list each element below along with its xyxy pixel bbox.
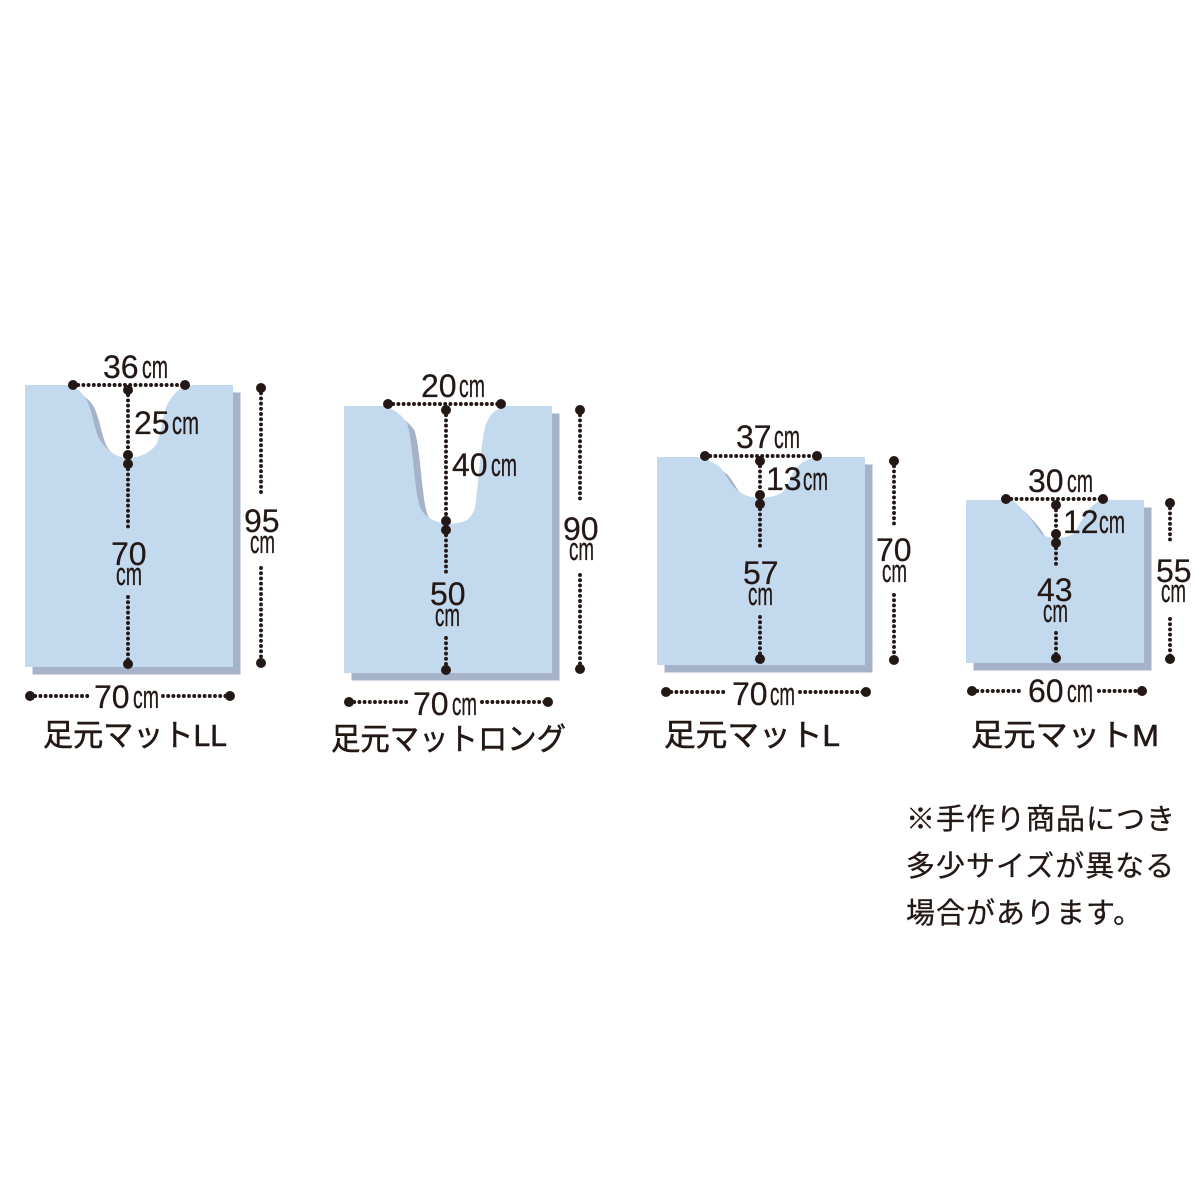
note text: 多少サイズが異なる [906,850,1175,883]
label 70cm bottom: 70 [94,679,130,715]
label 30cm: 30 [1028,463,1064,499]
label 20cm: 20 [421,368,457,404]
mat shape LL [25,385,233,667]
label 95cm: 95 [244,503,280,539]
label 57cm: cm [748,576,773,612]
label 30cm [1028,463,1093,499]
label 13cm: 13 [766,461,802,497]
label 25cm: 25 [134,405,170,441]
panel: 足元マットLL [25,349,280,753]
label 70cm bottom: cm [133,679,159,715]
label 70cm inner: 70 [111,536,147,572]
label 25cm: cm [172,405,199,441]
name M: 足元マットM [971,718,1159,753]
label 43cm: cm [1043,593,1068,629]
name long: 足元マットロング [331,722,566,757]
mat shadow M [974,508,1152,670]
label 43cm: 43 [1037,572,1073,608]
dimension lines LL [25,380,266,701]
mat shape M [966,500,1144,663]
label 95cm: cm [250,524,275,560]
label 70cm bottom long [413,686,477,722]
label 70cm bottom L: cm [770,676,795,712]
label 90cm: cm [569,531,594,567]
label 55cm [1156,553,1192,609]
label 13cm: cm [803,461,828,497]
label 50cm: cm [435,597,460,633]
name LL: 足元マットLL [43,718,227,753]
label 70cm bottom long: 70 [413,686,449,722]
label 70cm bottom [94,679,159,715]
panel: 足元マットM [966,463,1192,753]
label 12cm [1063,504,1125,540]
dimension lines M [967,494,1175,696]
label 70cm bottom long: cm [452,686,477,722]
label 60cm bottom: cm [1067,673,1093,709]
label 70cm inner [111,536,147,592]
label 70cm bottom L: 70 [732,676,768,712]
label 40cm: cm [491,447,517,483]
label 30cm: cm [1067,463,1093,499]
label 36cm: 36 [103,349,139,385]
label 36cm [103,349,168,385]
label 95cm [244,503,280,560]
label 60cm bottom: 60 [1028,673,1064,709]
label 36cm: cm [142,349,168,385]
label 57cm [743,555,779,612]
label 60cm bottom [1028,673,1093,709]
label 90cm [563,511,599,567]
note text: 場合があります。 [906,897,1143,930]
note text: ※手作り商品につき [906,803,1176,836]
label 50cm: 50 [430,576,466,612]
label 50cm [430,576,466,633]
name L: 足元マットL [664,718,840,753]
label 70cm right: 70 [876,532,912,568]
mat shape long [344,406,552,673]
label 12cm: cm [1099,504,1125,540]
label 25cm [134,405,199,441]
label 20cm: cm [459,368,485,404]
label 40cm: 40 [452,447,488,483]
dimension lines L [661,451,899,697]
dimension lines long [344,399,585,707]
label 13cm [766,461,828,497]
mat shape L [657,457,865,665]
label 55cm: 55 [1156,553,1192,589]
label 90cm: 90 [563,511,599,547]
label 70cm bottom L [732,676,795,712]
label 70cm inner: cm [116,556,142,592]
label 12cm: 12 [1063,504,1099,540]
panel: 足元マットロング [331,368,599,757]
label 43cm [1037,572,1073,629]
label 70cm right [876,532,912,589]
mat shadow LL [32,392,240,674]
label 70cm right: cm [882,553,907,589]
note text [906,803,1176,930]
label 20cm [421,368,485,404]
label 37cm: 37 [736,419,772,455]
mat shadow L [664,464,872,672]
label 37cm: cm [774,419,800,455]
label 37cm [736,419,800,455]
label 40cm [452,447,517,483]
label 57cm: 57 [743,555,779,591]
panel: 足元マットL [657,419,912,753]
mat shadow long [352,414,560,680]
